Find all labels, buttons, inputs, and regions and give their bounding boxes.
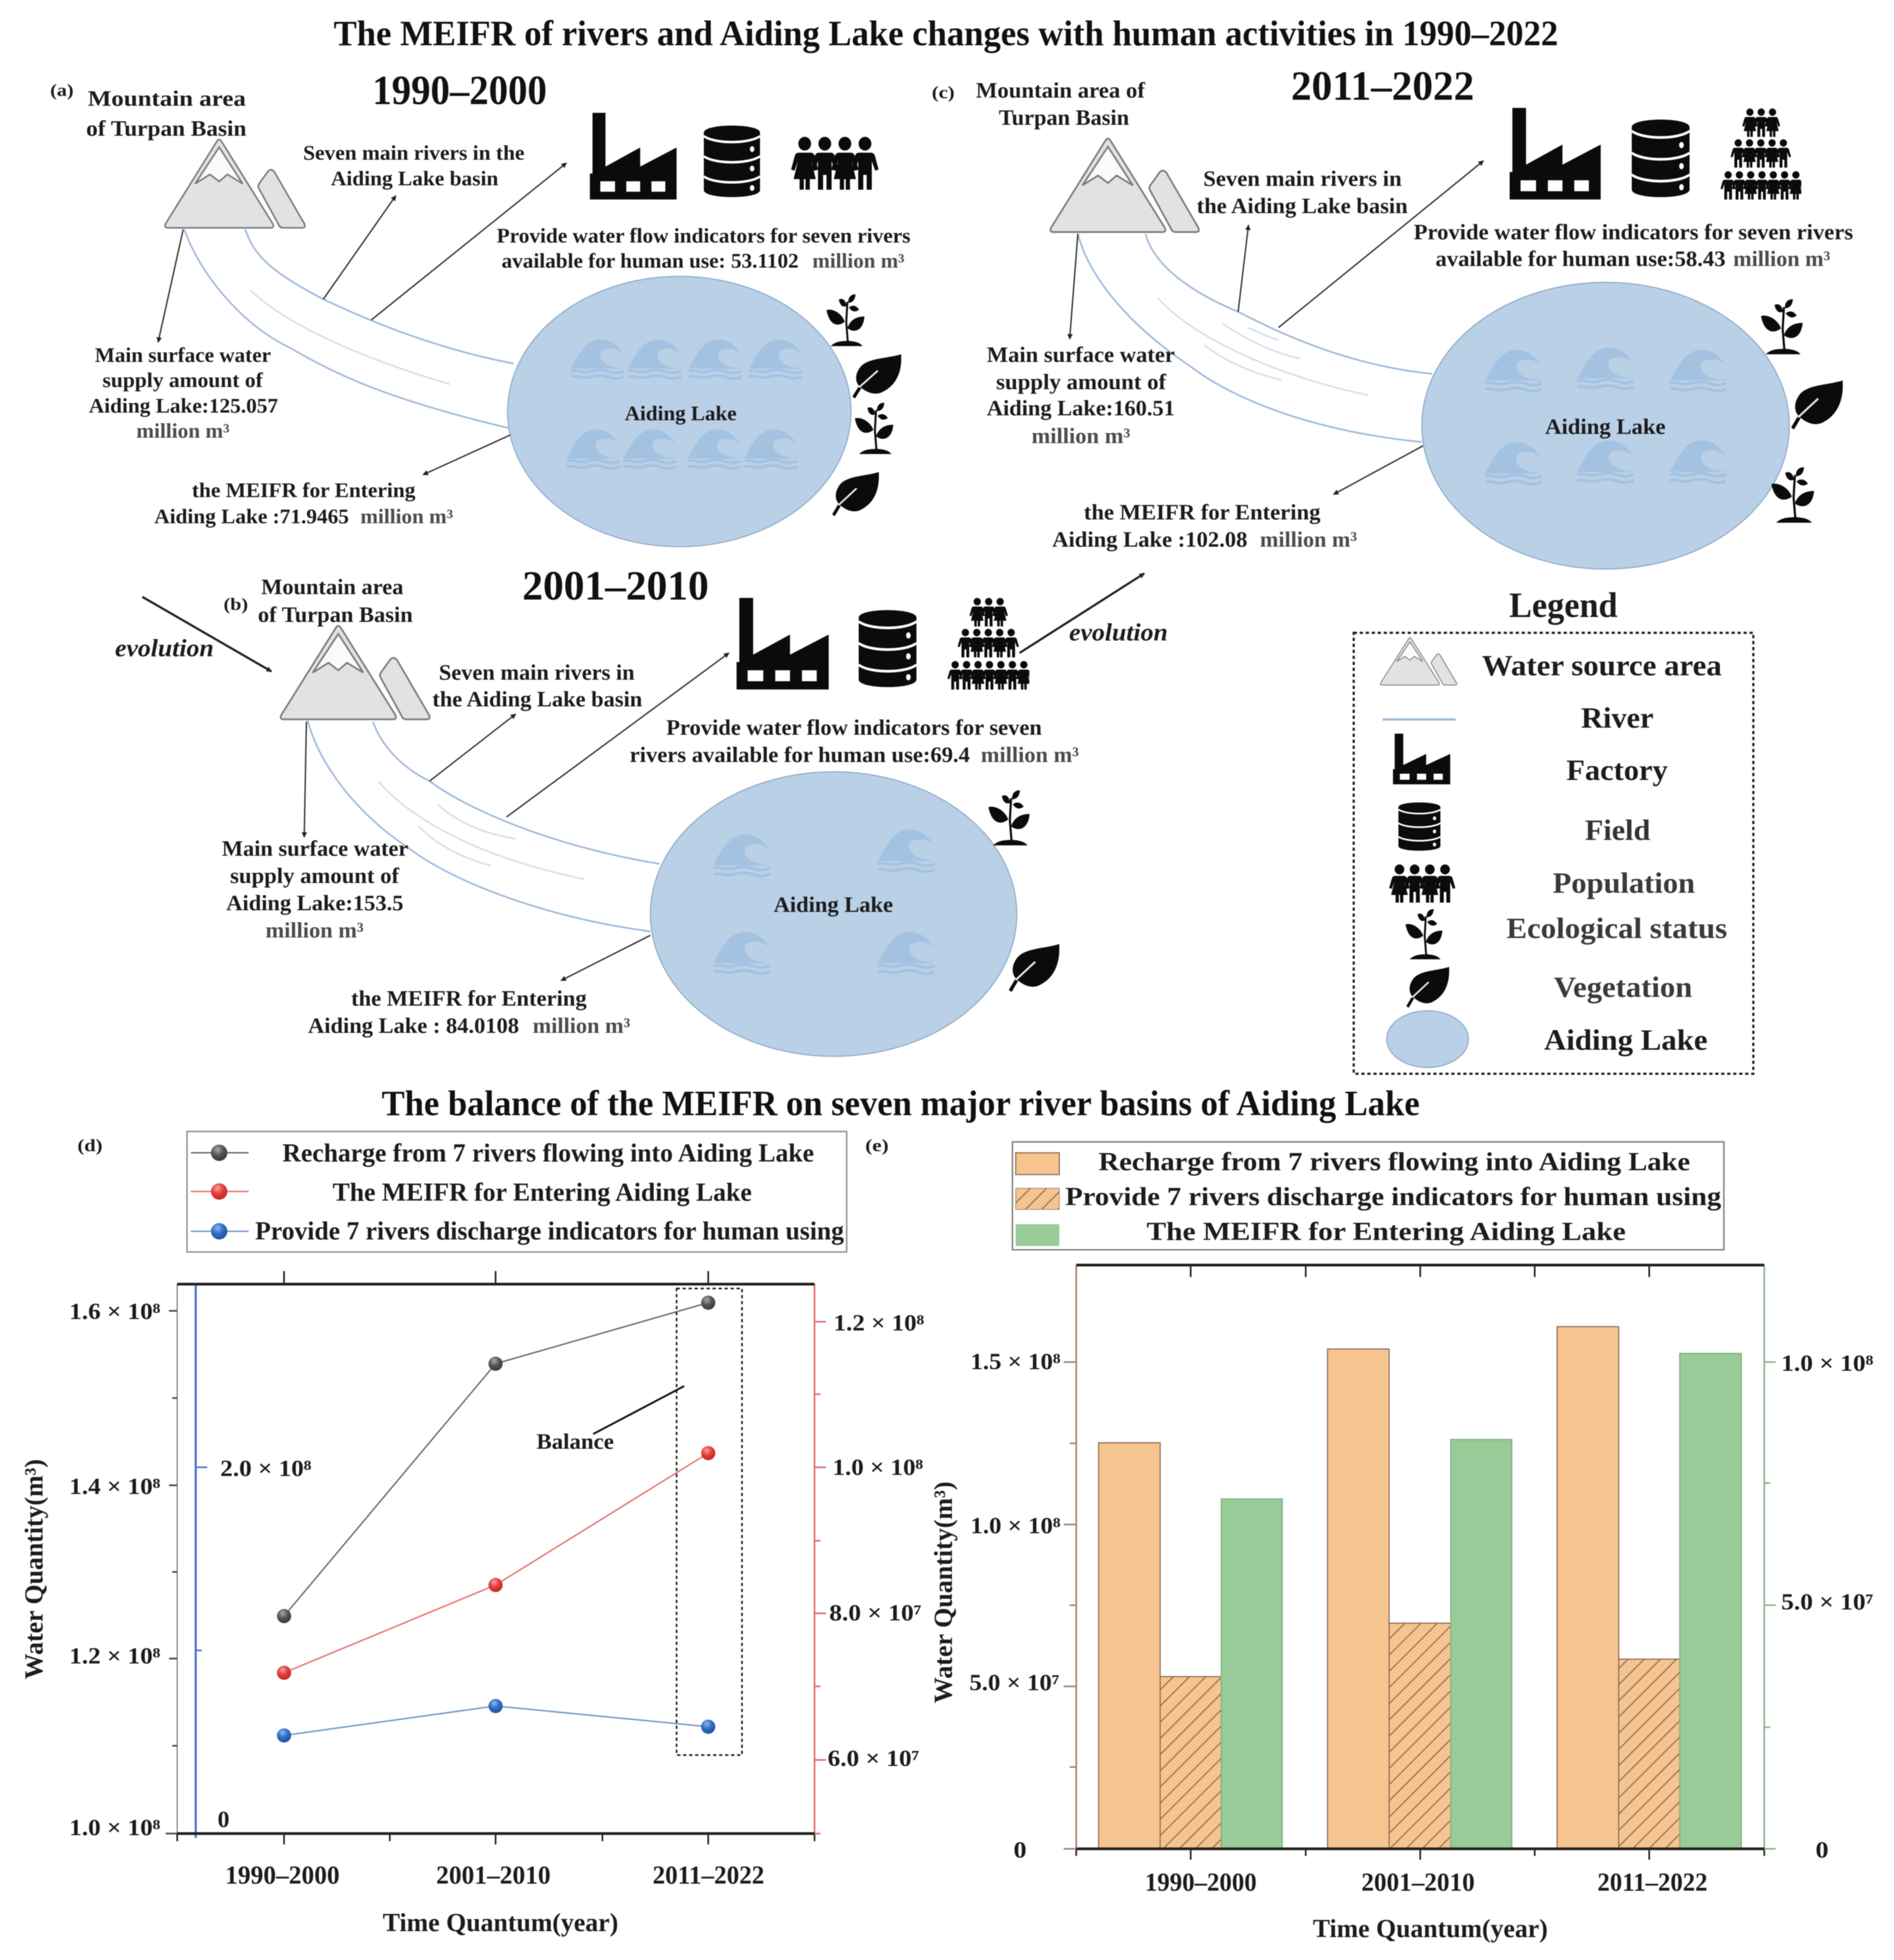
label: surface water: supply amount of (102, 369, 263, 392)
x labels: 2011–2022 (653, 1861, 764, 1890)
left axis labels: 1.6 × 10⁸ (69, 1299, 160, 1324)
period heading: 2011–2022 (1291, 63, 1474, 109)
left axis labels: 1.2 × 10⁸ (69, 1644, 160, 1669)
panel: (d) line chart (20, 1132, 924, 1937)
label: surface water: supply amount of (996, 370, 1167, 394)
label: MEIFR (1052, 500, 1357, 552)
legend: population (1389, 864, 1695, 903)
label: human use flow (630, 715, 1079, 767)
chart legend: Recharge from 7 rivers flowing into Aiding Lake (282, 1139, 814, 1167)
label: surface water: Aiding Lake:153.5 (226, 891, 403, 915)
label: seven rivers (432, 660, 642, 711)
label: mountain area: Mountain area (261, 574, 403, 599)
river (1078, 234, 1432, 442)
arrows (304, 653, 729, 981)
right axis labels: 1.0 × 10⁸ (833, 1455, 923, 1480)
label: mountain area: of Turpan Basin (258, 602, 413, 627)
legend: factory (1393, 734, 1668, 787)
title: The MEIFR of rivers and Aiding Lake changes with human activities in 1990–2022 (334, 14, 1558, 53)
right axis labels: 0 (1815, 1838, 1829, 1863)
label: MEIFR (154, 479, 453, 528)
label: human use flow: available for human use:58.43 (1435, 246, 1726, 271)
legend: lake (1387, 1011, 1708, 1067)
chart legend: Provide 7 rivers discharge indicators for human using (255, 1217, 844, 1245)
icon: mountain (1051, 138, 1199, 232)
legend box (1354, 633, 1753, 1074)
series: human use (277, 1699, 715, 1743)
panel: (b) 2001–2010 (222, 563, 1079, 1056)
label: seven rivers: Aiding Lake basin (331, 167, 498, 190)
river (307, 720, 660, 931)
label: MEIFR: Aiding Lake :71.9465 (154, 505, 349, 528)
y title: Water Quantity(m³) (20, 1459, 49, 1679)
label: MEIFR: million m³ (533, 1013, 630, 1038)
icons: ecology (827, 294, 901, 515)
right axis labels: 1.2 × 10⁸ (834, 1311, 924, 1336)
icons: human use (590, 113, 879, 199)
label: surface water: million m³ (136, 420, 230, 443)
panel tag c: (c) (932, 82, 955, 102)
label: surface water: Main surface water (222, 836, 408, 861)
axes (1064, 1265, 1776, 1860)
label: mountain area: Mountain area (88, 86, 246, 111)
label: surface water: Main surface water (95, 344, 271, 367)
label: surface water: Aiding Lake:160.51 (987, 396, 1175, 420)
label: human use flow: million m³ (1733, 246, 1830, 271)
right axis labels: 5.0 × 10⁷ (1781, 1590, 1873, 1615)
icon: mountain (281, 626, 430, 719)
axes (166, 1271, 826, 1844)
x labels (1145, 1868, 1708, 1897)
label: human use flow (497, 225, 910, 273)
x labels: 1990–2000 (225, 1861, 340, 1890)
bars: 2011–2022 (1557, 1327, 1741, 1849)
label: mountain area: Turpan Basin (999, 105, 1129, 130)
chart legend: Provide 7 rivers discharge indicators for human using (1065, 1182, 1721, 1211)
legend: water source: Water source area (1482, 649, 1722, 682)
label: human use flow (1414, 220, 1853, 271)
x labels: 2001–2010 (1361, 1868, 1475, 1897)
lake: Aiding Lake (774, 892, 893, 917)
label: surface water: Main surface water (987, 342, 1175, 367)
label: MEIFR: Aiding Lake : 84.0108 (308, 1013, 519, 1038)
legend: factory: Factory (1566, 754, 1668, 787)
lake (650, 772, 1017, 1056)
label: MEIFR: million m³ (360, 505, 453, 528)
left axis labels (69, 1299, 160, 1841)
y title: Water Quantity(m³) (929, 1481, 958, 1703)
icons: human use (1510, 108, 1803, 199)
label: human use flow: available for human use: 53.1102 (502, 250, 799, 273)
lake: Aiding Lake (625, 402, 737, 425)
chart legend (187, 1132, 847, 1252)
label: human use flow: Provide water flow indicators for seven rivers (1414, 220, 1853, 244)
panel: (c) 2011–2022 (932, 63, 1853, 569)
label: MEIFR: the MEIFR for Entering (351, 986, 587, 1011)
panel: (e) bar chart (865, 1135, 1873, 1943)
x labels: 1990–2000 (1145, 1868, 1257, 1897)
label: surface water: million m³ (266, 918, 364, 942)
chart legend: The MEIFR for Entering Aiding Lake (1147, 1217, 1626, 1246)
chart legend: Recharge from 7 rivers flowing into Aiding Lake (1099, 1147, 1690, 1176)
bars: 2001–2010 (1328, 1349, 1512, 1849)
panel: (a) 1990–2000 (50, 68, 910, 547)
legend: water source (1380, 638, 1722, 685)
icons: human use (737, 598, 1032, 689)
river (184, 228, 514, 428)
arrow: evolution into b: evolution (115, 634, 214, 662)
label: human use flow: Provide water flow indicators for seven (666, 715, 1042, 740)
label: MEIFR (308, 986, 630, 1038)
legend: lake: Aiding Lake (1544, 1024, 1708, 1056)
label: surface water (89, 344, 278, 443)
chart legend (1012, 1142, 1724, 1250)
icon: mountain (165, 140, 305, 228)
x labels (225, 1861, 764, 1890)
left axis labels: 1.4 × 10⁸ (69, 1474, 160, 1499)
label: seven rivers: Seven main rivers in (1203, 166, 1402, 191)
x title: Time Quantum(year) (383, 1908, 618, 1937)
right axis labels: 1.0 × 10⁸ (1781, 1351, 1873, 1376)
left axis labels: 0 (1014, 1838, 1027, 1863)
panel tag d: (d) (77, 1135, 102, 1155)
label: human use flow: Provide water flow indicators for seven rivers (497, 225, 910, 247)
label: mountain area: Mountain area of (976, 78, 1145, 102)
arrow: evolution into b (115, 597, 272, 672)
panel tag a: (a) (50, 80, 74, 100)
icons: ecology (988, 790, 1059, 991)
blue axis labels (218, 1456, 311, 1832)
x labels: 2011–2022 (1597, 1868, 1708, 1897)
series: MEIFR (277, 1446, 715, 1680)
label: seven rivers: Seven main rivers in (439, 660, 635, 685)
lake: Aiding Lake (1545, 414, 1666, 439)
label: MEIFR: the MEIFR for Entering (192, 479, 415, 502)
left axis labels: 1.0 × 10⁸ (69, 1816, 160, 1841)
label: human use flow: million m³ (981, 742, 1079, 767)
panel tag b: (b) (224, 594, 248, 614)
label: surface water: supply amount of (230, 863, 400, 888)
label: surface water: million m³ (1032, 424, 1130, 448)
arrow: evolution into c: evolution (1069, 618, 1168, 646)
label: surface water: Aiding Lake:125.057 (89, 395, 278, 418)
label: mountain area (976, 78, 1145, 130)
right axis labels: 8.0 × 10⁷ (829, 1601, 921, 1626)
label: human use flow: million m³ (812, 250, 904, 273)
blue axis labels: 0 (218, 1807, 230, 1832)
legend (1354, 585, 1753, 1074)
label: human use flow: rivers available for human use:69.4 (630, 742, 970, 767)
blue axis labels: 2.0 × 10⁸ (220, 1456, 311, 1481)
label: seven rivers (1197, 166, 1408, 218)
period heading: 1990–2000 (372, 68, 547, 113)
x title: Time Quantum(year) (1313, 1914, 1548, 1943)
left axis labels: 1.5 × 10⁸ (970, 1350, 1060, 1375)
legend: ecological status (1406, 909, 1727, 959)
legend: vegetation (1408, 967, 1692, 1007)
legend: ecological status: Ecological status (1506, 912, 1727, 945)
series: recharge (277, 1296, 715, 1623)
arrows (1070, 161, 1483, 494)
label: mountain area (86, 86, 246, 141)
panel tag e: (e) (865, 1135, 889, 1155)
legend heading: Legend (1509, 585, 1618, 625)
label: surface water (222, 836, 408, 942)
left axis labels (969, 1350, 1060, 1863)
arrows (158, 163, 566, 475)
label: MEIFR: the MEIFR for Entering (1084, 500, 1320, 524)
label: mountain area (258, 574, 413, 627)
label: MEIFR: million m³ (1260, 527, 1357, 552)
label: seven rivers: the Aiding Lake basin (432, 687, 642, 711)
right axis labels (1781, 1351, 1873, 1863)
legend: field: Field (1585, 814, 1650, 846)
legend: river: River (1581, 701, 1654, 734)
period heading: 2001–2010 (522, 563, 709, 609)
left axis labels: 1.0 × 10⁸ (970, 1514, 1060, 1539)
legend: population: Population (1553, 867, 1695, 899)
callout: balance (536, 1288, 742, 1755)
legend: vegetation: Vegetation (1554, 971, 1692, 1003)
right axis labels: 6.0 × 10⁷ (828, 1746, 919, 1771)
chart legend: The MEIFR for Entering Aiding Lake (333, 1178, 752, 1207)
legend: field (1398, 802, 1650, 851)
label: mountain area: of Turpan Basin (86, 116, 246, 141)
callout: balance: Balance (536, 1429, 614, 1454)
icons: ecology (1761, 299, 1843, 523)
lake (1422, 282, 1789, 569)
label: surface water (987, 342, 1175, 448)
label: seven rivers: Seven main rivers in the (303, 142, 524, 165)
label: seven rivers: the Aiding Lake basin (1197, 193, 1408, 218)
label: MEIFR: Aiding Lake :102.08 (1052, 527, 1247, 552)
arrow: evolution into c (1020, 573, 1168, 653)
bars: 1990–2000 (1099, 1443, 1282, 1849)
lake (508, 276, 851, 547)
right axis labels (828, 1311, 924, 1771)
x labels: 2001–2010 (436, 1861, 551, 1890)
left axis labels: 5.0 × 10⁷ (969, 1671, 1059, 1696)
label: seven rivers (303, 142, 524, 190)
heading: balance: The balance of the MEIFR on seven major river basins of Aiding Lake (382, 1084, 1420, 1123)
